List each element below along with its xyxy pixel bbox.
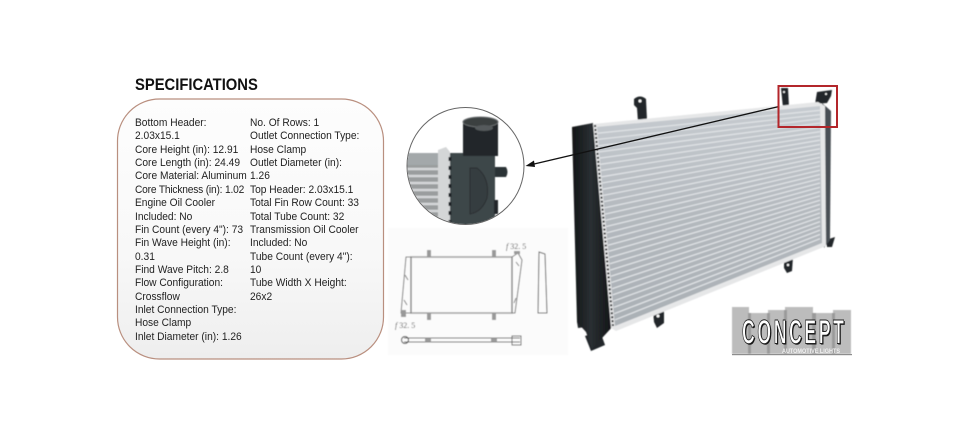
radiator product photo (572, 88, 835, 351)
logo: Concept Automotive Lights: CONCEPT (743, 313, 848, 352)
logo: Concept Automotive Lights: AUTOMOTIVE LIGHTS (782, 348, 841, 355)
text block: specifications column 2: No. Of Rows: 1 Outlet Connection Type: Hose Clamp Outlet Diameter (in): 1.26 Top Header: 2.03x15.1 Total Fin Row Count: 33 Total Tube Count: 32 Transmission Oil Cooler Included: No Tube Count (every 4"): 10 Tube Width X Height: 26x2 (250, 117, 359, 303)
panel: specifications background (118, 99, 384, 359)
technical drawing panel: f 32. 5 (506, 242, 526, 251)
radiator frame (593, 102, 826, 331)
radiator core fins (597, 106, 822, 326)
left plastic tank (572, 123, 614, 349)
arrow from red box to inset (526, 107, 778, 167)
title: SPECIFICATIONS (135, 76, 258, 94)
text block: specifications column 1: Bottom Header: 2.03x15.1 Core Height (in): 12.91 Core Length (in): 24.49 Core Material: Aluminum Core Thickness (in): 1.02 Engine Oil Cooler Included: No Fin Count (every 4"): 73 Fin Wave Height (in): 0.31 Find Wave Pitch: 2.8 Flow Configuration: Crossflow Inlet Connection Type: Hose Clamp Inlet Diameter (in): 1.26 (135, 117, 247, 343)
logo: Concept Automotive Lights: CONCEPT (742, 312, 847, 351)
technical drawing panel (388, 228, 568, 355)
callout: red highlight box (778, 86, 837, 127)
technical drawing panel: f 32. 5 (395, 321, 415, 330)
right plastic tank (822, 103, 831, 248)
bracket tabs (577, 88, 835, 351)
icon: circular inset of outlet neck (405, 108, 524, 225)
